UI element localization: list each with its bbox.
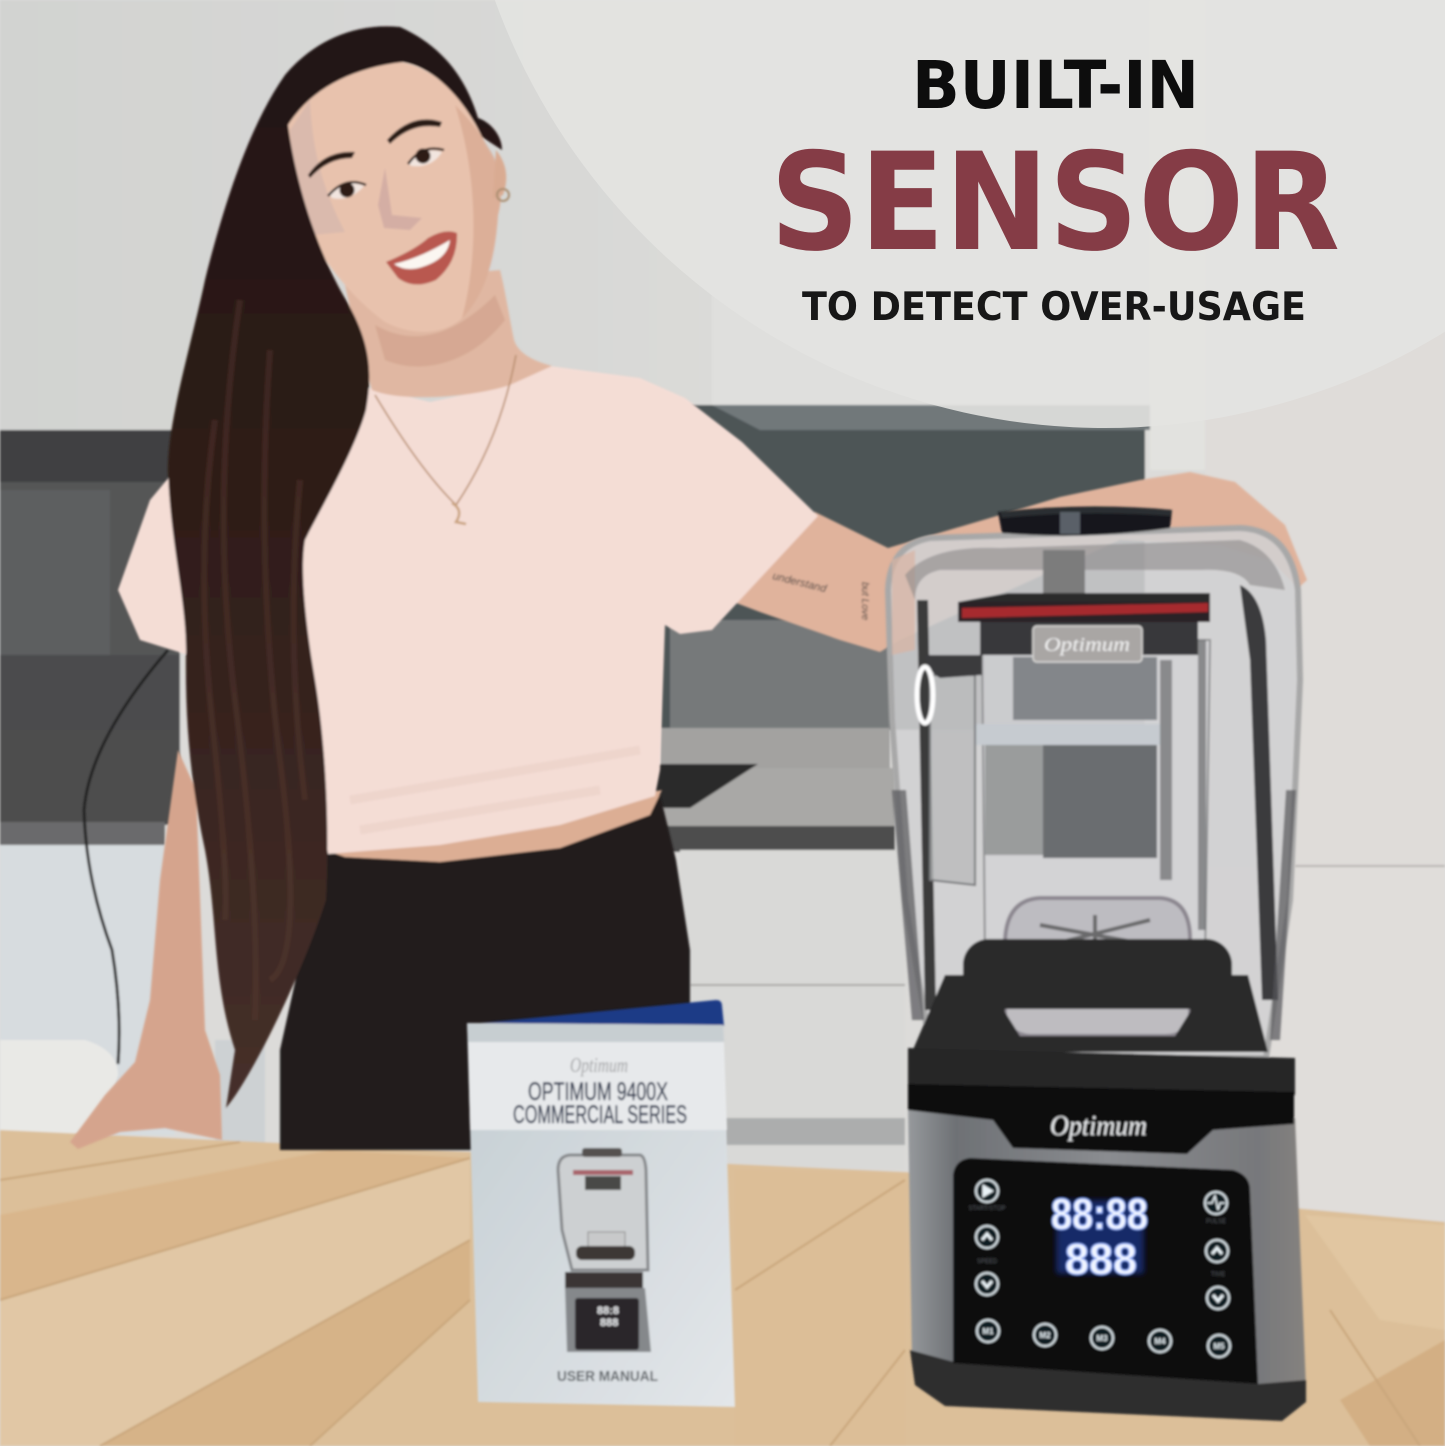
- button captions: START/STOP: [968, 1206, 1006, 1212]
- booklet title line 2: COMMERCIAL SERIES: [513, 1101, 687, 1129]
- glass shell: [888, 528, 1300, 1058]
- hair: [168, 26, 502, 1108]
- blender: [888, 506, 1306, 1421]
- time digits: 88:88: [1051, 1190, 1148, 1239]
- left eye: [328, 182, 366, 199]
- left backsplash: [0, 430, 180, 740]
- jar body: [982, 640, 1210, 960]
- right brow: [387, 119, 442, 144]
- chair: [0, 1040, 118, 1135]
- cabinet handle: [725, 1118, 905, 1145]
- midriff: [325, 790, 662, 862]
- left edge dark: [892, 790, 924, 1020]
- right lower cabinet: [680, 850, 905, 1170]
- neck shadow: [375, 295, 505, 367]
- built-in: BUILT-IN: [912, 47, 1199, 124]
- right upper cabinets: [712, 0, 1152, 405]
- left backsplash dark shelf: [0, 430, 180, 482]
- logo band: [908, 1084, 1294, 1154]
- right edge dark: [1270, 790, 1296, 1040]
- display glow: [1056, 1200, 1144, 1274]
- mini blender: [558, 1148, 651, 1352]
- blade cup: [1005, 898, 1190, 1036]
- right lower wall panel: [1205, 866, 1445, 1226]
- booklet title line 1: OPTIMUM 9400X: [528, 1078, 668, 1106]
- left tile highlight: [0, 490, 110, 655]
- blades: [1040, 915, 1150, 945]
- left counter top: [0, 730, 180, 825]
- user manual booklet: [467, 1000, 735, 1407]
- button captions: SPEED: [977, 1259, 998, 1265]
- speed digits: 888: [1065, 1235, 1137, 1284]
- neck of lid: [1043, 550, 1085, 594]
- red stripe: [962, 603, 1208, 618]
- cover white band: [468, 1042, 727, 1130]
- power cable: [84, 650, 168, 1064]
- wooden table: [0, 1130, 1445, 1446]
- jar upper reflection: [1013, 657, 1157, 720]
- earring: [497, 189, 509, 201]
- left brow: [308, 152, 355, 178]
- right hood shadow: [712, 405, 1150, 430]
- left arm: [70, 750, 222, 1149]
- shirt folds: [350, 750, 640, 830]
- preset labels: [982, 1327, 1225, 1351]
- red lid strip: [958, 602, 1210, 622]
- shell light flare: [917, 667, 933, 723]
- user manual label: USER MANUAL: [557, 1368, 658, 1385]
- right counter surface: [660, 768, 895, 830]
- lid top black: [958, 593, 1210, 604]
- pendant: [452, 503, 466, 524]
- front cover: [467, 1023, 735, 1407]
- jar handle: [930, 675, 975, 885]
- collar: [908, 1048, 1295, 1095]
- necklace: [375, 355, 516, 505]
- nose shadow: [378, 168, 422, 230]
- t-shirt: [118, 366, 818, 854]
- preset labels: M3: [1096, 1334, 1108, 1343]
- callout circle: [456, 0, 1445, 428]
- preset labels: M5: [1213, 1342, 1225, 1351]
- mini blender: 88:8: [597, 1305, 619, 1317]
- preset labels: M2: [1039, 1331, 1051, 1340]
- preset labels: M1: [982, 1327, 994, 1336]
- button captions: TIME: [1211, 1272, 1225, 1278]
- neck: [345, 270, 552, 397]
- tattoo text: understand: [771, 570, 828, 595]
- jar dark reflection: [1043, 745, 1157, 858]
- headline: [770, 47, 1340, 330]
- button captions: PULSE: [1206, 1219, 1226, 1225]
- jar left reflection: [985, 745, 1043, 855]
- jar strip: [1160, 640, 1206, 930]
- woman: [70, 26, 1307, 1150]
- brand badge: Optimum: [1044, 634, 1130, 656]
- preset labels: M4: [1154, 1337, 1166, 1346]
- blue back cover: [480, 1000, 724, 1026]
- table plank mid: [100, 1240, 470, 1446]
- right backsplash: [660, 405, 1145, 730]
- table plank right: [1305, 1215, 1445, 1330]
- left lower cabinet: [0, 845, 175, 1135]
- rubber grip: [963, 939, 1232, 1009]
- face shade right: [455, 105, 501, 318]
- upper cabinets: [0, 0, 712, 432]
- table plank right lower: [1340, 1340, 1445, 1446]
- logo script: Optimum: [1050, 1110, 1147, 1142]
- face: [288, 62, 501, 332]
- jar mid line: [975, 724, 1160, 745]
- right inner bar: [1240, 585, 1278, 1000]
- button icons: [982, 1185, 1225, 1301]
- top lid: [998, 506, 1172, 536]
- table plank front: [735, 1170, 905, 1446]
- left inner bar: [917, 600, 936, 1010]
- tattoo text second: but Love: [859, 582, 870, 621]
- mouth: [386, 231, 457, 285]
- left cabinet side: [215, 1040, 265, 1145]
- hair strands: [204, 300, 305, 1020]
- right eye: [408, 148, 444, 166]
- subtitle: TO DETECT OVER-USAGE: [802, 285, 1306, 330]
- right tile light: [670, 620, 890, 730]
- right counter edge: [655, 826, 895, 852]
- base pad: [912, 975, 1268, 1052]
- left counter edge: [0, 822, 165, 845]
- forehead shadow: [290, 100, 345, 235]
- booklet logo: Optimum: [570, 1053, 628, 1077]
- right counter: [660, 728, 890, 770]
- cover header band: [467, 1023, 724, 1042]
- motor body: [908, 1105, 1306, 1388]
- left lower tile: [0, 655, 180, 730]
- panel buttons: [976, 1180, 1230, 1357]
- mini blender: 888: [600, 1317, 618, 1329]
- right wall: [1205, 0, 1445, 866]
- table plank light: [0, 1158, 470, 1446]
- right arm: [715, 472, 1307, 652]
- control panel: [953, 1158, 1258, 1384]
- skin through glass: [892, 550, 915, 655]
- table plank dark left: [0, 1150, 470, 1300]
- vertical pillar: [1150, 0, 1205, 470]
- dark band under lid: [980, 622, 1198, 655]
- shell top shadow: [905, 540, 1285, 600]
- ear: [493, 150, 506, 198]
- cooktop: [650, 764, 758, 808]
- sensor: SENSOR: [770, 124, 1340, 281]
- base foot: [910, 1350, 1306, 1421]
- brand badge: [1033, 626, 1142, 662]
- button captions: [968, 1206, 1226, 1278]
- pants: [280, 795, 695, 1150]
- handle cap: [925, 655, 982, 678]
